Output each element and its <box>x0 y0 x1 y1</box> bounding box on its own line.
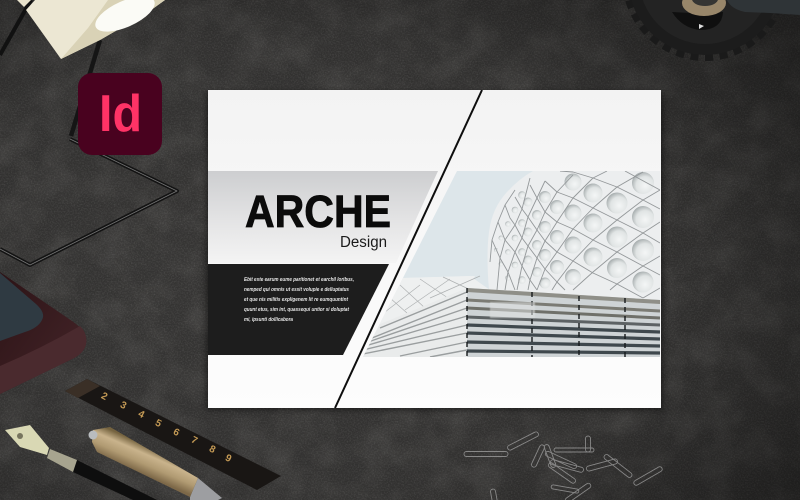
slatted building left face <box>363 288 467 357</box>
gear in top right corner <box>626 0 800 57</box>
paper clips <box>464 431 663 500</box>
ruler with gold numerals: 4 <box>136 409 146 421</box>
body text: mi, ipsunti dollicabora <box>244 317 293 323</box>
panel: grey title band <box>208 171 438 263</box>
ruler with gold numerals: 5 <box>153 418 163 430</box>
title: ARCHE: ARCHE <box>245 186 391 237</box>
ruler with gold numerals: 6 <box>171 427 181 439</box>
ruler with gold numerals: 8 <box>207 444 217 456</box>
icon: InDesign app badge <box>78 73 162 155</box>
brochure shadow <box>206 92 663 410</box>
body text <box>244 277 354 323</box>
panel: black text block <box>208 264 389 355</box>
image: architecture photo <box>360 171 660 357</box>
black pen with ivory nib <box>5 425 157 500</box>
brass pen <box>88 427 222 500</box>
panel: brochure page <box>208 90 661 408</box>
body text: Ebit este earum eume paritionet et earchil loribus, <box>244 277 354 283</box>
low roof lattice <box>380 276 488 324</box>
ruler with gold numerals: 9 <box>223 453 233 465</box>
subtitle: Design: Design <box>340 234 387 251</box>
body text: nemped qui omnis ut essit volupie e delluptatus <box>244 287 349 293</box>
body text: et que nis militis expligenem lit re eumquuntint <box>244 297 349 303</box>
notebook stack with leather cover <box>0 272 86 394</box>
diagonal black rule <box>335 90 482 408</box>
slatted building front face <box>467 288 660 357</box>
ruler with gold numerals: 3 <box>118 400 128 412</box>
desk lamp with wire stand <box>0 0 177 265</box>
icon: InDesign app badge: Id <box>99 85 142 143</box>
ruler with gold numerals <box>65 379 281 490</box>
ruler with gold numerals: 2 <box>99 391 109 403</box>
body text: quunt etus, sim int, quassequi untior si doluptat <box>244 307 350 313</box>
curved building facade <box>488 171 660 300</box>
ruler with gold numerals: 7 <box>189 435 199 447</box>
